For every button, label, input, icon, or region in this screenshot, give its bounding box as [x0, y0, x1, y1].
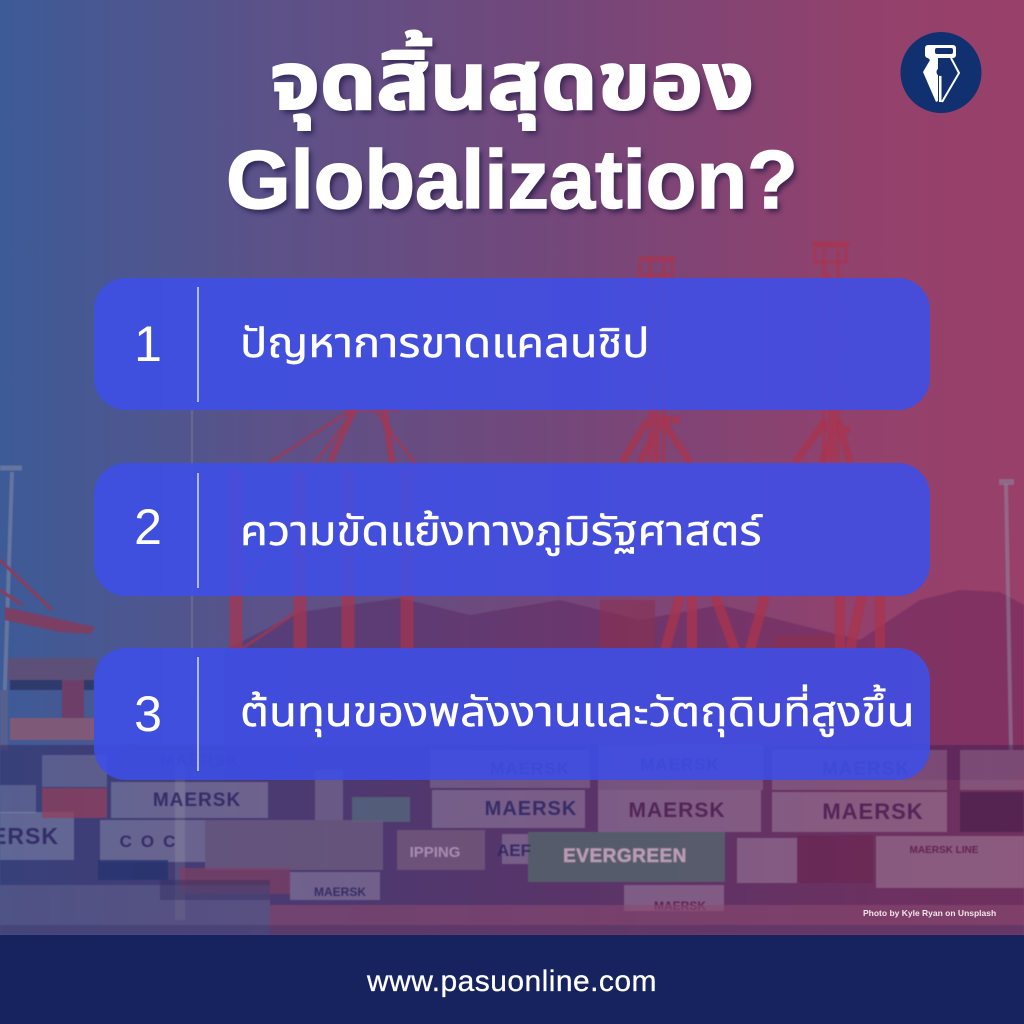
- website URL: www.pasuonline.com: [367, 965, 657, 998]
- row 1: [0, 745, 1024, 820]
- row 2: [0, 782, 1024, 911]
- item 2 text: ความขัดแย้งทางภูมิรัฐศาสตร์: [240, 508, 762, 554]
- container labels: COC: [120, 832, 184, 851]
- quay crane left edge: [0, 560, 96, 750]
- crane right: [795, 243, 880, 650]
- container labels: MAERSK: [822, 759, 910, 780]
- container labels: MAERSK: [490, 759, 570, 778]
- title line 1: จุดสิ้นสุดของ: [270, 37, 754, 126]
- item 3 text: ต้นทุนของพลังงานและวัตถุดิบที่สูงขึ้น: [240, 689, 915, 735]
- container labels: MAERSK: [314, 885, 366, 899]
- number 1: 1: [134, 316, 162, 372]
- panel: item 2: [94, 463, 930, 596]
- stack base: [0, 745, 1024, 935]
- ship deck: [0, 880, 1024, 935]
- container labels: MAERSK LINE: [910, 845, 979, 856]
- icon: pen nib logo: [900, 32, 982, 113]
- containers: EVERGREEN: [563, 846, 687, 867]
- containers: IPPING: [410, 844, 460, 861]
- panel: item 3: [94, 648, 930, 780]
- light poles: [0, 410, 1014, 920]
- container labels: MAERSK: [640, 755, 720, 774]
- item 1 text: ปัญหาการขาดแคลนชิป: [240, 320, 650, 366]
- container labels: AEF: [497, 841, 531, 860]
- container labels: MAERSK: [153, 790, 241, 811]
- photo credit: Photo by Kyle Ryan on Unsplash: [863, 908, 996, 918]
- number 3: 3: [134, 686, 162, 742]
- dockside machinery: [600, 600, 835, 650]
- crane centre: [622, 258, 765, 650]
- container labels: MAERSK: [160, 751, 240, 770]
- container labels: MAERSK: [628, 799, 726, 822]
- crane left: [236, 408, 420, 650]
- container labels: [0, 751, 979, 913]
- title: [226, 30, 798, 226]
- footer band: [0, 935, 1024, 1024]
- container labels: MAERSK: [654, 899, 706, 913]
- panel: item 1: [94, 278, 930, 410]
- darker containers: [42, 788, 107, 818]
- title line 2: Globalization?: [226, 133, 798, 226]
- number 2: 2: [134, 499, 162, 555]
- mountains: [225, 590, 1024, 780]
- container labels: MAERSK: [822, 799, 924, 824]
- container labels: MAERSK: [485, 798, 577, 820]
- containers: [0, 745, 1024, 935]
